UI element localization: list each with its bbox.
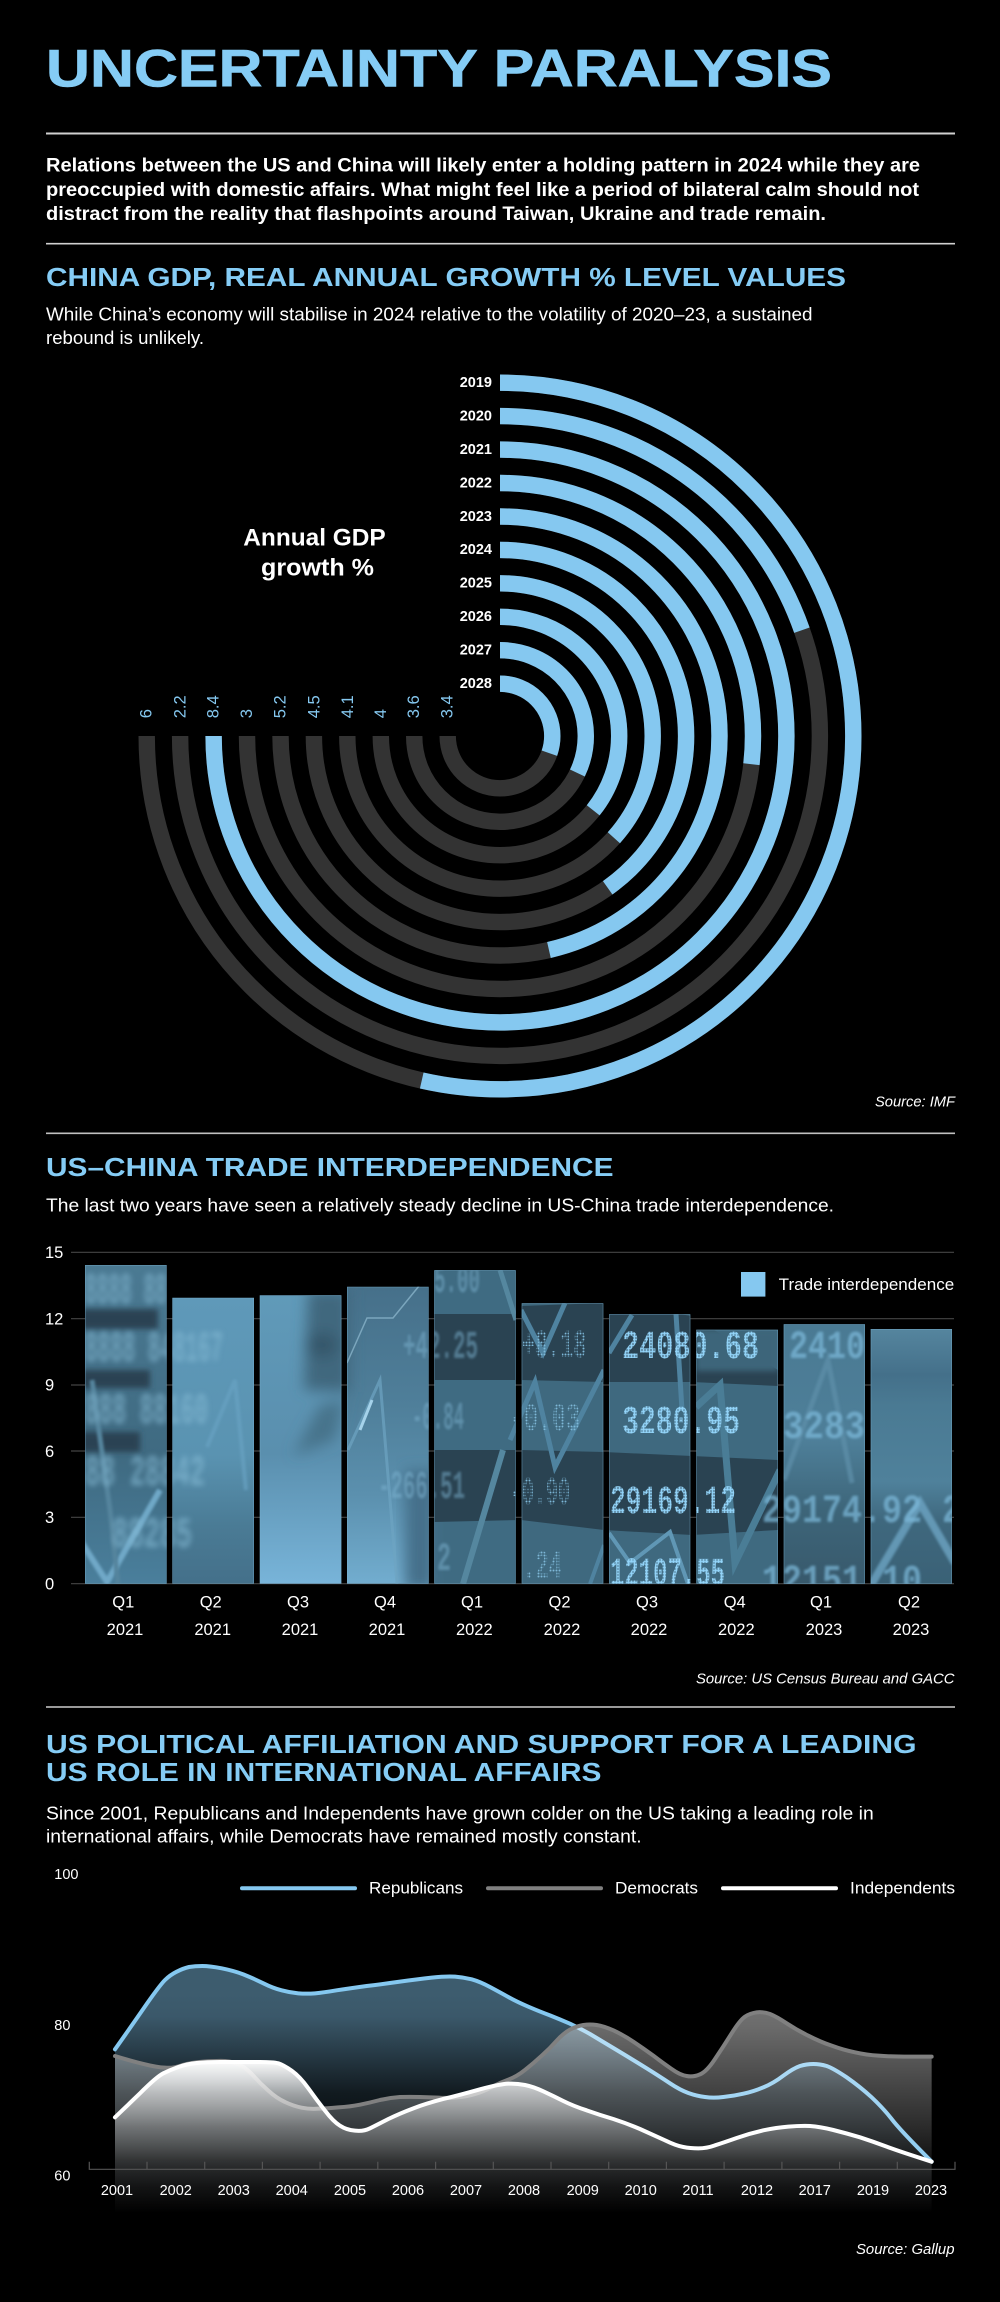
description: China GDP — [46, 304, 812, 348]
heading: China GDP: CHINA GDP, REAL ANNUAL GROWTH % LEVEL VALUES — [46, 264, 846, 292]
x axis labels — [107, 1594, 929, 1639]
x axis year labels: 2011 — [682, 2183, 714, 2199]
rotated growth values: 4 — [372, 709, 390, 718]
dotted ticker digits, bar 6: .24 — [522, 1546, 562, 1591]
dotted ticker digits, bar 6: -0.03 — [510, 1398, 580, 1443]
year labels: 2024 — [460, 542, 492, 558]
bright ticker digits, bars 7-8: 29169.12 — [610, 1481, 736, 1526]
x axis labels: 2023 — [806, 1621, 842, 1639]
description: China GDP: rebound is unlikely. — [46, 328, 204, 348]
series: Republicans — [115, 1966, 932, 2213]
description: trade: The last two years have seen a relatively steady decline in US-China trade interdependence. — [46, 1196, 834, 1216]
intro text: distract from the reality that flashpoints around Taiwan, Ukraine and trade remain. — [46, 204, 826, 225]
x axis labels: 2022 — [456, 1621, 493, 1639]
x axis year labels: 2023 — [915, 2183, 947, 2199]
x axis labels: 2022 — [631, 1621, 667, 1639]
x axis year labels: 2012 — [741, 2183, 773, 2199]
rotated growth values: 3.4 — [439, 695, 457, 718]
chart lines in photo — [80, 1270, 955, 1590]
x axis year labels: 2006 — [392, 2183, 424, 2199]
rotated growth values — [138, 695, 457, 718]
year labels — [460, 375, 492, 692]
x axis labels: Q2 — [898, 1594, 920, 1612]
y axis labels: 15 — [45, 1244, 63, 1262]
year labels: 2028 — [460, 676, 492, 692]
series: Democrats — [115, 2012, 932, 2213]
x axis year labels: 2017 — [799, 2183, 831, 2199]
rotated growth values: 4.5 — [305, 695, 323, 718]
bars with financial ticker photo fill: 5.00 — [434, 1260, 480, 1305]
year labels: 2026 — [460, 609, 492, 625]
y axis labels: 6 — [45, 1443, 54, 1461]
x axis year labels: 2008 — [508, 2183, 540, 2199]
chart label: Annual GDP growth — [243, 525, 386, 582]
y axis labels: 100 — [54, 1867, 79, 1883]
soft ticker digits, bars 9-10: 3283 — [783, 1406, 865, 1451]
year labels: 2022 — [460, 475, 492, 491]
bar highlight edges — [85, 1265, 952, 1584]
year labels: 2027 — [460, 642, 492, 658]
bars with financial ticker photo fill — [85, 1265, 952, 1584]
blurred ticker digits, left bars: 8888 88 — [85, 1267, 167, 1317]
bright ticker digits, bars 7-8: 3280.95 — [622, 1401, 740, 1446]
rotated growth values: 6 — [138, 709, 156, 718]
x axis year labels: 2009 — [567, 2183, 599, 2199]
ring 2020 — [180, 416, 820, 1056]
description: China GDP: While China’s economy will stabilise in 2024 relative to the volatility of 2020–23, a sustained — [46, 304, 812, 324]
intro text: preoccupied with domestic affairs. What might feel like a period of bilateral calm should not — [46, 180, 920, 201]
x axis labels: 2021 — [194, 1621, 231, 1639]
description: political affiliation: Since 2001, Republicans and Independents have grown colder on the US taking a leading role in — [46, 1803, 874, 1823]
faint ticker digits, bars 4-5: 2 — [437, 1538, 451, 1583]
faint ticker digits, bars 4-5: -0.84 — [412, 1397, 464, 1442]
title: UNCERTAINTY PARALYSIS — [46, 40, 832, 98]
blurred ticker digits, left bars: 888 88160 — [85, 1387, 208, 1437]
soft ticker digits, bars 9-10: 12151.10 — [762, 1560, 922, 1605]
heading: trade interdependence: US–CHINA TRADE INTERDEPENDENCE — [46, 1154, 614, 1182]
ring 2022 — [247, 483, 753, 989]
panel: US political affiliation area chart — [46, 1731, 955, 2258]
ring 2021 — [214, 450, 786, 1022]
intro text — [46, 156, 920, 225]
dotted ticker digits, bar 6: +8.18 — [522, 1325, 586, 1370]
year labels: 2019 — [460, 375, 492, 391]
y axis labels — [54, 1867, 79, 2184]
heading: political affiliation: US POLITICAL AFFILIATION AND SUPPORT FOR A LEADING — [46, 1731, 916, 1759]
x axis year labels: 2001 — [101, 2183, 133, 2199]
panel: China GDP radial chart — [46, 264, 956, 1111]
x axis labels: 2022 — [718, 1621, 755, 1639]
x axis labels: Q3 — [287, 1594, 309, 1612]
source: IMF: Source: IMF — [875, 1094, 956, 1111]
bright ticker digits, bars 7-8 — [610, 1326, 759, 1598]
x axis year labels: 2007 — [450, 2183, 482, 2199]
faint ticker digits, bars 4-5 — [378, 1260, 480, 1583]
rotated growth values: 3.6 — [405, 695, 423, 718]
source: US Census Bureau and GACC: Source: US Census Bureau and GACC — [696, 1670, 955, 1687]
heading: political affiliation: US ROLE IN INTERNATIONAL AFFAIRS — [46, 1759, 602, 1787]
blurred ticker digits, left bars — [85, 1267, 223, 1561]
dotted ticker digits, bar 6 — [514, 1330, 584, 1578]
x axis year labels: 2019 — [857, 2183, 889, 2199]
dotted ticker digits, bar 6: -0.90 — [510, 1472, 570, 1517]
description: political affiliation — [46, 1803, 874, 1846]
rotated growth values: 2.2 — [171, 695, 189, 718]
ring 2024 — [314, 550, 686, 922]
chart label: Annual GDP growth: Annual GDP — [243, 525, 386, 552]
x axis year labels: 2002 — [160, 2183, 192, 2199]
dark shapes, bar 3 — [294, 1290, 350, 1455]
ring 2023 — [280, 516, 720, 955]
radial bars — [147, 383, 853, 1089]
intro text: Relations between the US and China will likely enter a holding pattern in 2024 while they are — [46, 156, 920, 176]
x axis labels: Q2 — [200, 1594, 222, 1612]
description: political affiliation: international affairs, while Democrats have remained mostly constant. — [46, 1826, 642, 1846]
x axis labels: Q1 — [461, 1594, 483, 1612]
legend: Independents — [850, 1879, 955, 1897]
x axis labels: Q1 — [810, 1594, 832, 1612]
soft ticker digits, bars 9-10: 29174.92 2 — [762, 1490, 962, 1535]
dark ticker bands, bars 5-8 — [434, 1303, 778, 1535]
blurred ticker digits, left bars: 88 28842 — [85, 1449, 205, 1499]
x axis year labels: 2004 — [276, 2183, 308, 2199]
y axis labels: 0 — [45, 1575, 54, 1593]
x axis year labels: 2005 — [334, 2183, 366, 2199]
series: Independents — [115, 2062, 932, 2213]
rotated growth values: 4.1 — [339, 695, 357, 718]
y axis labels: 12 — [45, 1310, 63, 1328]
heading: political affiliation — [46, 1731, 916, 1787]
soft ticker digits, bars 9-10 — [762, 1330, 952, 1584]
legend: Democrats — [615, 1879, 698, 1897]
x axis labels: 2022 — [544, 1621, 580, 1639]
bright ticker digits, bars 7-8: 12107.55 — [610, 1553, 725, 1598]
x axis year labels — [101, 2183, 947, 2199]
x axis year labels: 2010 — [625, 2183, 657, 2199]
year labels: 2025 — [460, 576, 492, 592]
y axis labels — [45, 1244, 63, 1593]
chart label: Annual GDP growth: growth % — [261, 555, 374, 582]
ring 2025 — [347, 583, 653, 889]
ring 2019 — [147, 383, 853, 1089]
year labels: 2020 — [460, 408, 492, 424]
bright ticker digits, bars 7-8: 24080.68 — [622, 1326, 759, 1371]
lower right shade, bar 4 — [405, 1470, 435, 1590]
x axis labels: 2021 — [107, 1621, 143, 1639]
x axis labels: 2021 — [369, 1621, 405, 1639]
soft ticker digits, bars 9-10: 2410 — [789, 1326, 865, 1371]
rotated growth values: 3 — [238, 709, 256, 718]
ring 2028 — [448, 684, 552, 788]
dark bands, bars 1-2 — [85, 1306, 161, 1454]
area chart — [115, 1966, 932, 2213]
ring 2026 — [381, 617, 619, 855]
x axis labels: 2023 — [893, 1621, 929, 1639]
year labels: 2023 — [460, 509, 492, 525]
legend: trade interdependence: Trade interdependence — [779, 1276, 954, 1294]
legend: trade interdependence — [741, 1272, 954, 1297]
panel: US-China trade bar chart — [45, 1154, 962, 1687]
x axis labels: Q2 — [548, 1594, 571, 1612]
y axis labels: 60 — [54, 2168, 70, 2184]
legend — [242, 1879, 955, 1897]
blurred ticker digits, left bars: 88285 — [112, 1511, 192, 1561]
ring 2027 — [414, 650, 586, 822]
x axis labels: 2021 — [282, 1621, 318, 1639]
rotated growth values: 8.4 — [205, 695, 223, 718]
x axis labels: Q3 — [636, 1594, 658, 1612]
y axis labels: 80 — [54, 2018, 70, 2034]
faint ticker digits, bars 4-5: -266.51 — [378, 1466, 465, 1511]
y axis labels: 3 — [45, 1509, 54, 1527]
x axis labels: Q4 — [374, 1594, 396, 1612]
x axis year labels: 2003 — [218, 2183, 250, 2199]
rotated growth values: 5.2 — [272, 695, 290, 718]
x axis labels: Q4 — [724, 1594, 746, 1612]
legend: Republicans — [369, 1879, 463, 1897]
year labels: 2021 — [460, 442, 492, 458]
y axis labels: 9 — [45, 1377, 54, 1395]
source: Gallup: Source: Gallup — [856, 2241, 954, 2258]
faint ticker digits, bars 4-5: +42.25 — [403, 1326, 478, 1371]
bars with financial ticker photo fill: 8888 848167 — [85, 1325, 223, 1375]
x axis labels: Q1 — [112, 1594, 134, 1612]
